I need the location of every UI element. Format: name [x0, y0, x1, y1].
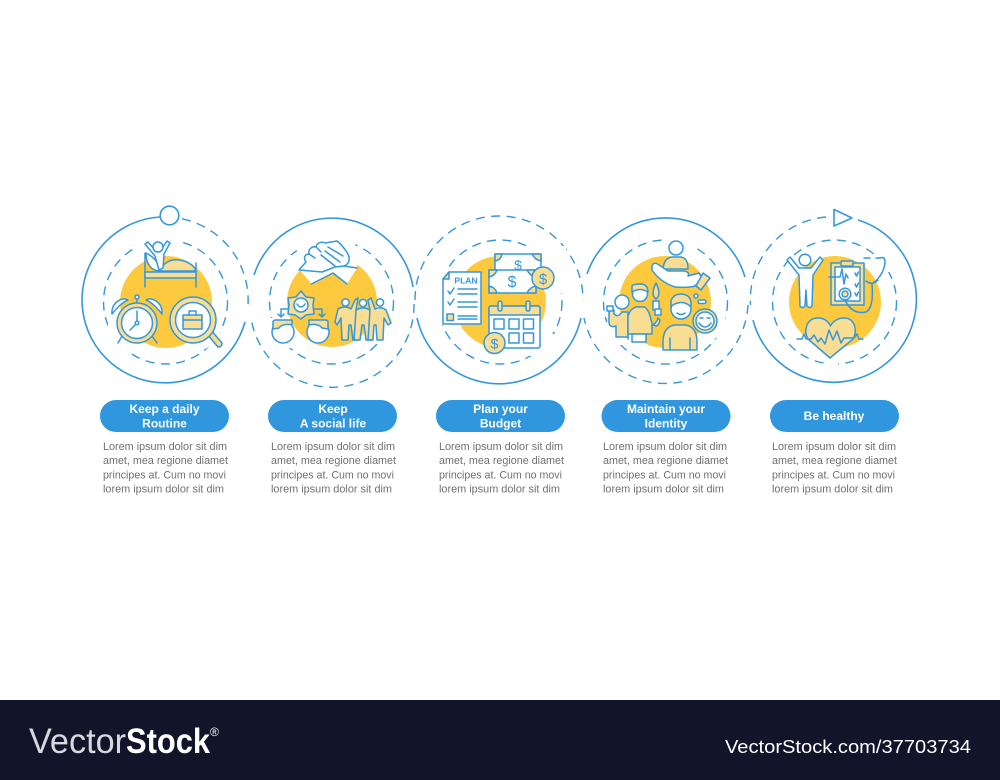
icon: banknotes and coin: [489, 254, 554, 293]
text block: step 4 description: [603, 441, 728, 496]
footer logo: Vector: [29, 722, 126, 761]
footer image id: VectorStock.com/37703734: [725, 736, 971, 757]
label pill: keep a daily routine: Routine: [142, 416, 187, 430]
text block: step 1 description: Lorem ipsum dolor sit dim: [103, 441, 227, 453]
yellow disc 1: [120, 256, 212, 348]
label pill: be healthy: [770, 400, 899, 432]
panel: step 2 keep a social life: [251, 218, 414, 387]
icon: banknotes and coin: $: [514, 257, 522, 273]
yellow disc 3: [454, 256, 546, 348]
panel: step 5 be healthy: [750, 210, 916, 382]
outer ring 4: [584, 218, 748, 383]
text block: step 5 description: principes at. Cum no movi: [772, 470, 895, 482]
text block: step 5 description: [772, 441, 897, 496]
inner dashed ring 2: [270, 240, 394, 364]
footer logo: Stock: [126, 722, 210, 761]
icon: person waking in bed: [145, 241, 196, 287]
text block: step 5 description: amet, mea regione diamet: [772, 455, 897, 467]
panel: step 4 maintain your identity: [584, 218, 748, 383]
icon: person raising arms: [787, 254, 823, 308]
label pill: keep a social life: [268, 400, 397, 432]
text block: step 1 description: amet, mea regione diamet: [103, 455, 228, 467]
icon: calendar and coin: $: [491, 336, 499, 352]
inner dashed ring 1: [104, 240, 228, 364]
label pill: keep a daily routine: Keep a daily: [129, 402, 200, 416]
label pill: maintain your identity: Identity: [645, 416, 688, 430]
panel: step 3 plan your budget: [415, 216, 583, 384]
text block: step 3 description: Lorem ipsum dolor sit dim: [439, 441, 563, 453]
icon: man with smiley badge: [663, 294, 717, 350]
icon: two young people with a paintbrush: [607, 283, 661, 342]
ring gaps 5: [825, 255, 892, 367]
text block: step 3 description: lorem ipsum dolor sit dim: [439, 484, 560, 496]
outer ring 3: [415, 216, 583, 384]
icon: star rating with heads: [272, 291, 329, 343]
outer ring 1: [82, 217, 248, 383]
label pill: keep a daily routine: [100, 400, 229, 432]
icon: magnifier with briefcase: [170, 297, 222, 347]
text block: step 5 description: lorem ipsum dolor sit dim: [772, 484, 893, 496]
label pill: keep a social life: A social life: [300, 416, 366, 430]
icon: alarm clock: [112, 295, 162, 343]
text block: step 5 description: Lorem ipsum dolor sit dim: [772, 441, 896, 453]
icon: plan checklist: [443, 272, 481, 324]
icon: plan checklist: PLAN: [454, 276, 478, 286]
label pill: plan your budget: Plan your: [473, 402, 528, 416]
text block: step 2 description: lorem ipsum dolor sit dim: [271, 484, 392, 496]
footer logo: [29, 722, 219, 761]
text block: step 1 description: principes at. Cum no movi: [103, 470, 226, 482]
text block: step 2 description: Lorem ipsum dolor sit dim: [271, 441, 395, 453]
white notch behind handshake: [295, 240, 357, 284]
text block: step 4 description: Lorem ipsum dolor sit dim: [603, 441, 727, 453]
yellow disc 5: [789, 256, 881, 348]
icon: handshake: [299, 241, 357, 284]
panel: step 1 keep a daily routine: [82, 206, 248, 383]
text block: step 2 description: amet, mea regione diamet: [271, 455, 396, 467]
icon: person on open hand: [652, 241, 710, 290]
footer logo: ®: [210, 725, 219, 739]
icon: group of three people: [335, 298, 391, 340]
inner dashed ring 4: [604, 240, 728, 364]
text block: step 4 description: lorem ipsum dolor sit dim: [603, 484, 724, 496]
label pill: keep a social life: Keep: [318, 402, 348, 416]
text block: step 1 description: lorem ipsum dolor sit dim: [103, 484, 224, 496]
yellow disc 4: [619, 256, 711, 348]
end marker triangle: [834, 210, 852, 226]
label pill: plan your budget: Budget: [480, 416, 521, 430]
text block: step 3 description: principes at. Cum no movi: [439, 470, 562, 482]
ring gaps 2: [265, 236, 392, 348]
inner dashed ring 5: [772, 240, 896, 364]
yellow disc 2: [287, 257, 377, 347]
icon: banknotes and coin: $: [539, 271, 548, 288]
icon: calendar and coin: [484, 301, 540, 354]
label pill: maintain your identity: [602, 400, 730, 432]
text block: step 1 description: [103, 441, 228, 496]
label pill: plan your budget: [436, 400, 565, 432]
label pill: maintain your identity: Maintain your: [627, 402, 705, 416]
icon: heart with pulse line: [797, 318, 863, 358]
text block: step 4 description: amet, mea regione diamet: [603, 455, 728, 467]
ring gaps 1: [108, 234, 221, 354]
ring gaps 3: [436, 246, 566, 356]
text block: step 3 description: [439, 441, 564, 496]
start marker circle: [160, 206, 179, 225]
icon: clipboard with stethoscope: [829, 258, 885, 312]
text block: step 4 description: principes at. Cum no movi: [603, 470, 726, 482]
outer ring 5: [750, 217, 916, 382]
text block: step 3 description: amet, mea regione diamet: [439, 455, 564, 467]
label pill: be healthy: Be healthy: [804, 409, 865, 423]
text block: step 2 description: [271, 441, 396, 496]
inner dashed ring 3: [438, 240, 562, 364]
text block: step 2 description: principes at. Cum no movi: [271, 470, 394, 482]
outer ring 2: [251, 218, 414, 387]
icon: banknotes and coin: $: [508, 274, 517, 291]
ring gaps 4: [598, 236, 726, 345]
footer band: [0, 700, 1000, 780]
